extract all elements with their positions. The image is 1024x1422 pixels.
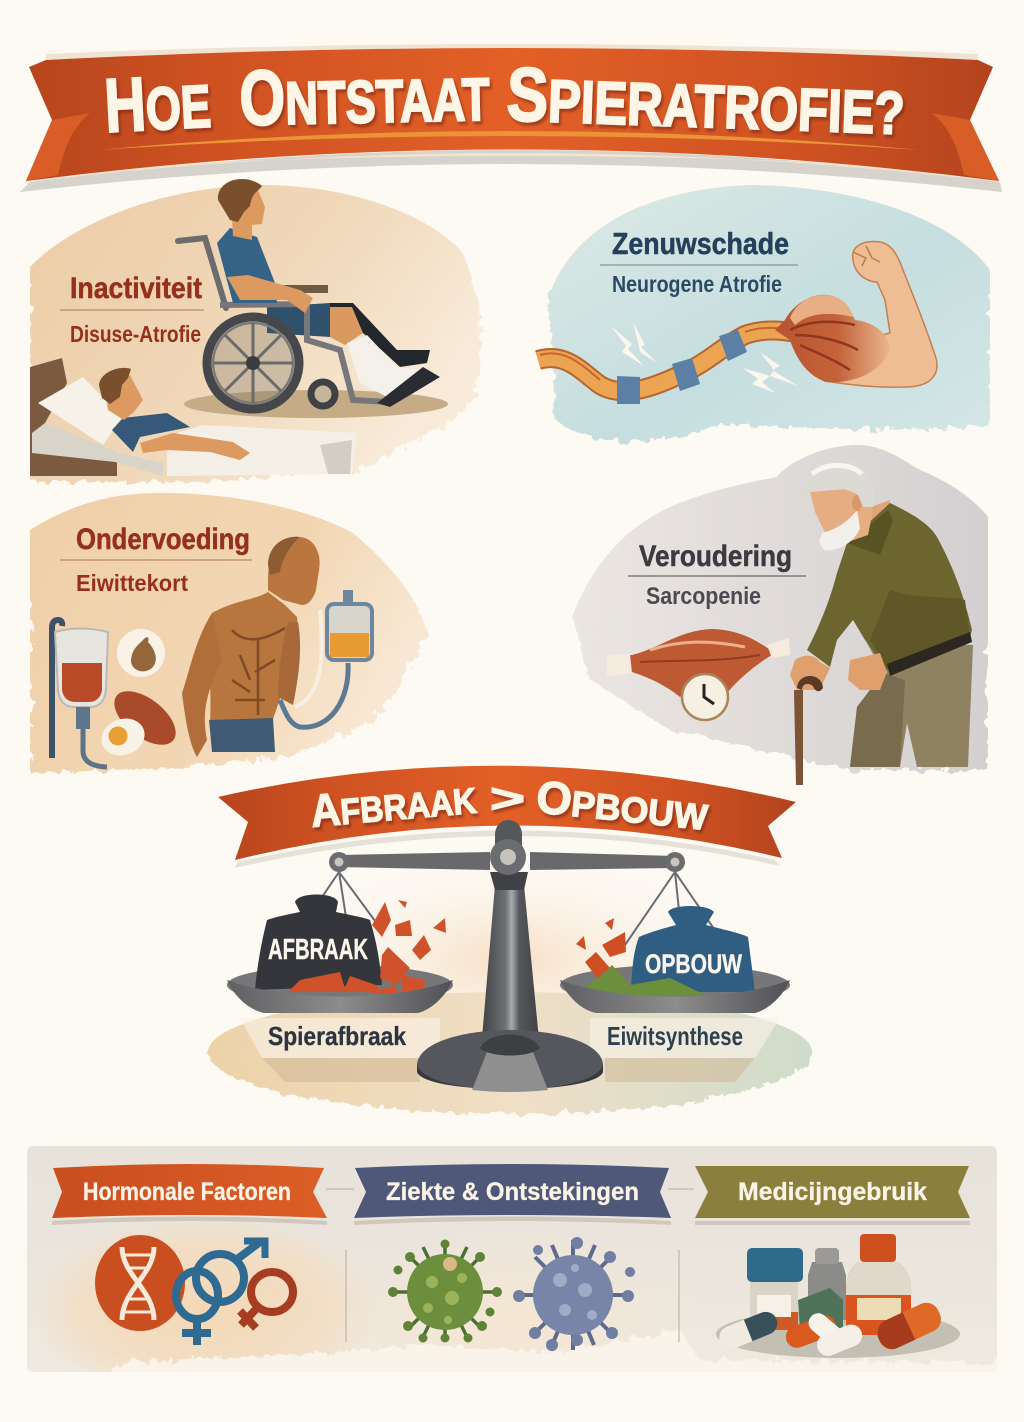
panel: inactiviteit bbox=[30, 179, 481, 482]
panel: zenuwschade bbox=[538, 185, 990, 441]
muscle pieces: afbraak bbox=[288, 900, 446, 994]
weight: afbraak bbox=[255, 894, 382, 990]
sub-banner text: AFBRAAK bbox=[308, 771, 478, 837]
ground ellipse bbox=[208, 990, 812, 1114]
heading: veroudering: Veroudering bbox=[639, 540, 792, 573]
panel: ondervoeding bbox=[30, 493, 427, 773]
ribbon: medicijngebruik: Medicijngebruik bbox=[738, 1178, 927, 1206]
subheading: disuse-atrofie: Disuse-Atrofie bbox=[70, 321, 201, 347]
sub-banner text bbox=[308, 770, 710, 840]
panel: other factors bbox=[27, 1146, 997, 1372]
illustration: man in wheelchair bbox=[178, 179, 448, 418]
ribbon: ziekte en ontstekingen: Ziekte & Ontstekingen bbox=[386, 1178, 639, 1206]
panel background bbox=[30, 185, 481, 482]
icon: nutrition iv bag bbox=[280, 590, 372, 727]
weight: afbraak: AFBRAAK bbox=[268, 934, 368, 966]
title banner bbox=[20, 44, 1002, 192]
greens and muscle pieces: opbouw bbox=[576, 918, 705, 997]
icon: medicine bottles and pills bbox=[716, 1234, 960, 1359]
ribbon: hormonale factoren bbox=[52, 1164, 327, 1225]
right pan back bbox=[560, 965, 790, 1005]
icon: clock bbox=[682, 674, 728, 720]
glow left bbox=[48, 1225, 358, 1372]
left pan back bbox=[227, 965, 453, 1005]
ribbon: ziekte en ontstekingen bbox=[354, 1164, 671, 1225]
weight: opbouw bbox=[631, 906, 755, 992]
sub-banner text: OPBOUW bbox=[534, 770, 710, 840]
label: spierafbraak: Spierafbraak bbox=[268, 1021, 406, 1051]
divider connectors bbox=[326, 1188, 694, 1190]
illustration: malnourished man bbox=[182, 537, 320, 757]
illustration: elderly man with cane bbox=[790, 458, 973, 785]
icon: purple virus bbox=[513, 1237, 635, 1351]
label: eiwitsynthese: Eiwitsynthese bbox=[607, 1021, 743, 1051]
panel: veroudering bbox=[572, 445, 988, 785]
panel background bbox=[30, 493, 427, 773]
glow background bbox=[260, 850, 760, 1070]
heading: zenuwschade: Zenuwschade bbox=[612, 226, 789, 261]
left pan front bbox=[227, 980, 453, 1013]
title text bbox=[102, 49, 906, 151]
label background bbox=[240, 1018, 780, 1058]
heading: ondervoeding: Ondervoeding bbox=[76, 523, 250, 556]
weight: opbouw: OPBOUW bbox=[645, 949, 742, 979]
icon: food items bbox=[96, 629, 185, 761]
scale post and beam bbox=[320, 820, 725, 1092]
icon: male symbol bbox=[176, 1241, 265, 1345]
subheading: eiwittekort: Eiwittekort bbox=[76, 570, 188, 596]
bottom wash bbox=[111, 1329, 997, 1372]
title text: ONTSTAAT bbox=[239, 49, 490, 142]
panel: balance bbox=[208, 766, 812, 1114]
shadows bbox=[262, 1058, 755, 1082]
illustration: patient in bed bbox=[30, 358, 357, 476]
sub-banner bbox=[218, 766, 796, 868]
icon: green virus bbox=[388, 1240, 502, 1342]
sub-banner text: > bbox=[490, 777, 525, 821]
icon: female symbol bbox=[240, 1272, 293, 1328]
subheading: sarcopenie: Sarcopenie bbox=[646, 583, 761, 610]
ribbon: hormonale factoren: Hormonale Factoren bbox=[83, 1178, 291, 1206]
icon: lightning bolts bbox=[611, 322, 798, 393]
panel background bbox=[548, 185, 990, 441]
icon: blood iv bag bbox=[52, 620, 108, 767]
illustration: arm with nerve bbox=[538, 242, 937, 404]
title text: HOE bbox=[102, 59, 213, 149]
title text: SPIERATROFIE? bbox=[505, 52, 906, 151]
panel background bbox=[27, 1146, 997, 1372]
subheading: neurogene atrofie: Neurogene Atrofie bbox=[612, 271, 782, 297]
glow centre bbox=[453, 1294, 562, 1349]
icon: dna circle bbox=[95, 1235, 185, 1331]
ribbon: medicijngebruik bbox=[695, 1166, 970, 1225]
right pan front bbox=[560, 980, 790, 1013]
icon: muscle bbox=[607, 629, 790, 697]
panel background bbox=[572, 445, 988, 770]
heading: inactiviteit: Inactiviteit bbox=[70, 272, 202, 305]
